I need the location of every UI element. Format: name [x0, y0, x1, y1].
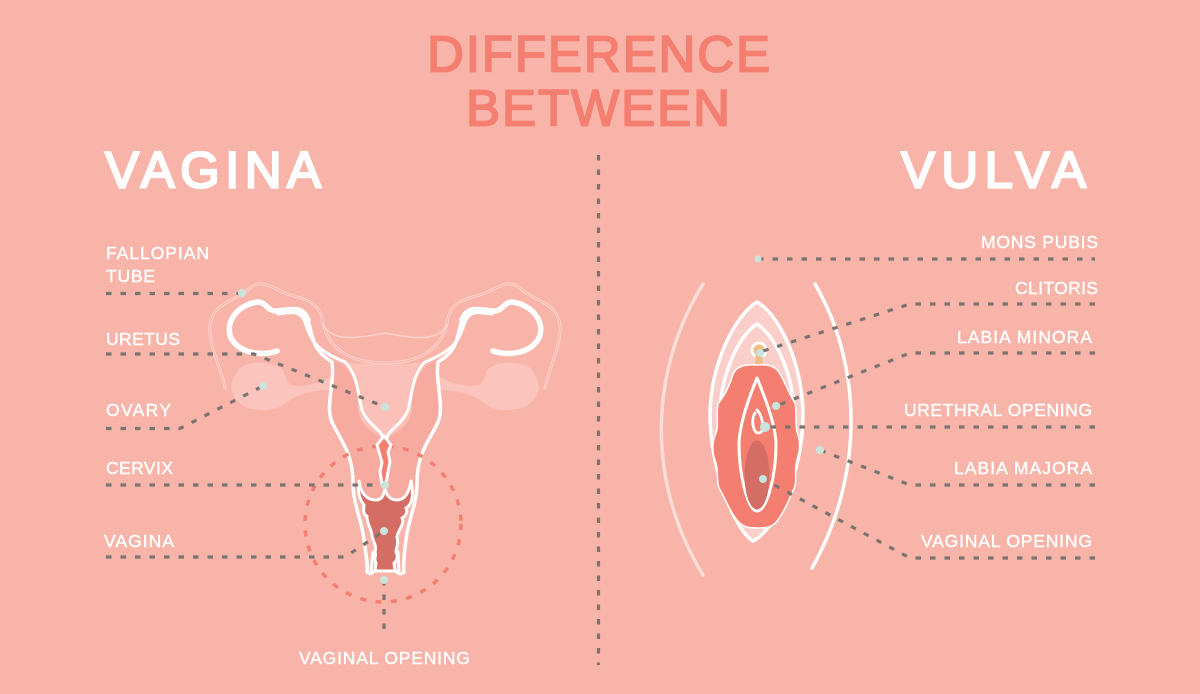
- labels: left: FALLOPIAN: [106, 243, 209, 263]
- labels: left: URETUS: [106, 329, 180, 349]
- center divider: [597, 155, 600, 665]
- vaginal canal: [358, 481, 412, 571]
- labels: left: VAGINAL OPENING: [299, 648, 470, 668]
- ovaries: [231, 363, 332, 410]
- heading: vulva: VULVA: [901, 142, 1086, 198]
- cervical canal: [377, 436, 391, 484]
- labels: left: OVARY: [106, 400, 171, 420]
- inner hood: [720, 324, 794, 410]
- labels: right: MONS PUBIS: [981, 232, 1098, 252]
- left tube and wall: [229, 302, 308, 353]
- outer hood: [710, 302, 803, 541]
- labels: right: [904, 232, 1098, 551]
- labia majora: [713, 365, 800, 528]
- labels: left: TUBE: [106, 266, 155, 286]
- title: [427, 26, 770, 136]
- diagram: uterus: [210, 284, 560, 572]
- clitoris: [750, 342, 768, 358]
- faint outer tube outlines: [210, 284, 560, 388]
- labels: right: LABIA MAJORA: [954, 458, 1092, 478]
- heading: vagina: VAGINA: [105, 142, 321, 198]
- labels: left: CERVIX: [106, 458, 173, 478]
- title: DIFFERENCE: [427, 26, 770, 82]
- labels: right: LABIA MINORA: [957, 327, 1092, 347]
- dashed circle: [305, 446, 461, 602]
- marker dots: [238, 256, 824, 584]
- labels: right: CLITORIS: [1015, 278, 1098, 298]
- vaginal opening: [744, 440, 770, 510]
- labels: left: [104, 243, 470, 668]
- right tube and wall: [462, 302, 541, 353]
- labels: right: URETHRAL OPENING: [904, 400, 1092, 420]
- outer arcs: [661, 284, 703, 575]
- uterus soft fills: [231, 360, 539, 500]
- labia minora: [739, 378, 776, 511]
- labels: right: VAGINAL OPENING: [921, 531, 1092, 551]
- title: BETWEEN: [466, 80, 730, 136]
- urethral opening: [753, 410, 763, 433]
- leader lines: [106, 259, 1095, 635]
- diagram: vulva: [661, 284, 851, 575]
- vaginal base: [367, 552, 404, 574]
- labels: left: VAGINA: [104, 531, 174, 551]
